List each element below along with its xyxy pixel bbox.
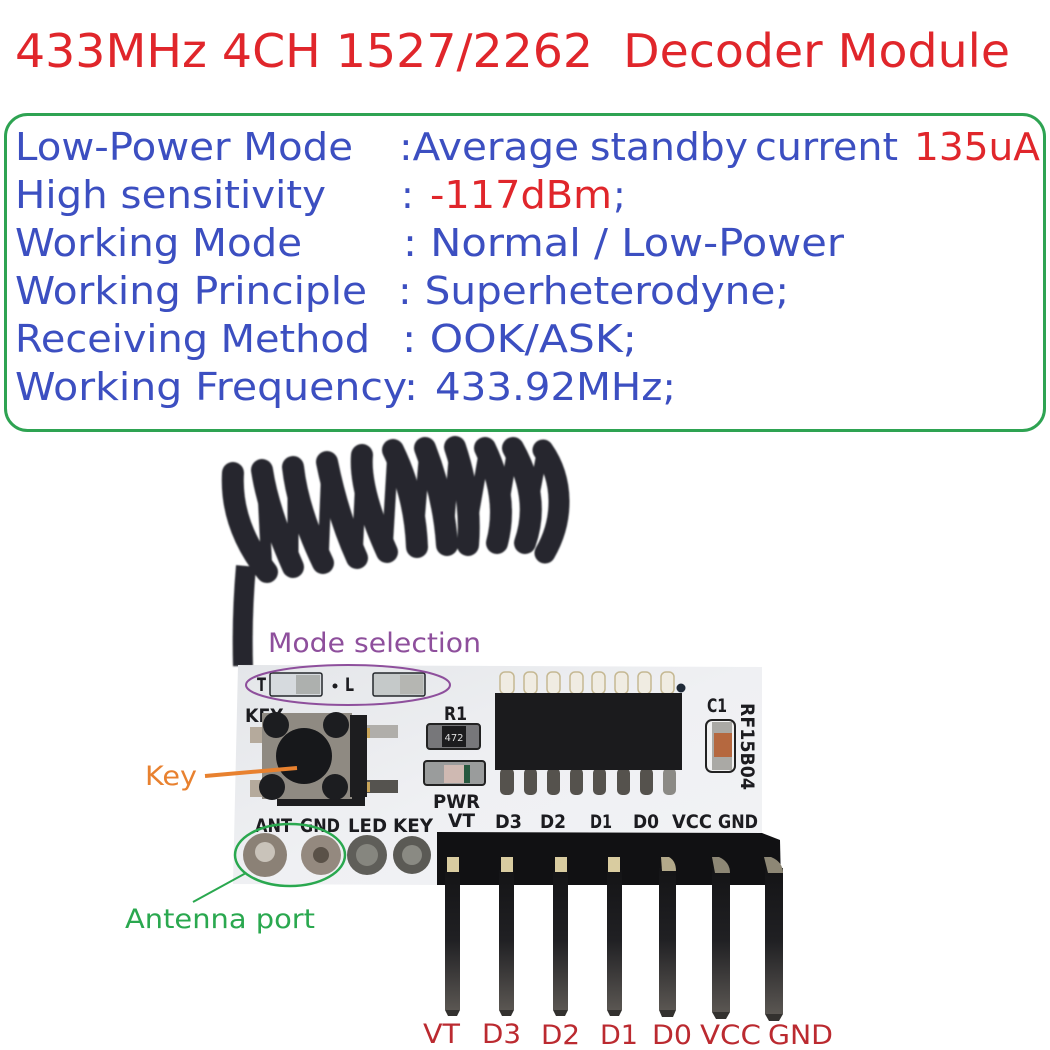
mode jumper T bbox=[257, 673, 322, 696]
pin silkscreen labels: ANT bbox=[255, 815, 292, 837]
spec: low-power mode: :Average bbox=[399, 125, 579, 169]
spec: receiving method: Receiving Method bbox=[15, 317, 370, 361]
board marking: RF15B04 bbox=[736, 703, 758, 790]
power LED bbox=[424, 761, 485, 813]
spec: working principle bbox=[15, 269, 789, 313]
resistor R1 bbox=[427, 703, 480, 749]
antenna coil bbox=[233, 447, 559, 666]
mode jumper L bbox=[332, 673, 425, 696]
pin silkscreen labels: VCC bbox=[672, 811, 712, 833]
key label: Key bbox=[145, 761, 197, 792]
pin VCC bbox=[712, 857, 730, 1019]
tactile key switch: KEY bbox=[245, 705, 283, 727]
mode jumper T: T bbox=[257, 674, 266, 696]
tactile key switch bbox=[245, 705, 398, 806]
spec: working frequency: Working Frequency: bbox=[15, 365, 418, 409]
pin D2 bbox=[553, 857, 568, 1016]
panel border bbox=[6, 114, 1044, 430]
pin silkscreen labels: LED bbox=[348, 815, 387, 837]
spec: receiving method: : OOK/ASK; bbox=[402, 317, 637, 361]
IC chip bbox=[495, 672, 686, 795]
pin silkscreen labels: D3 bbox=[495, 811, 522, 833]
spec: high sensitivity: -117dBm bbox=[430, 173, 612, 217]
power LED: PWR bbox=[433, 791, 480, 813]
pin D3 bbox=[499, 857, 514, 1016]
spec: low-power mode: standby bbox=[590, 125, 748, 169]
pin silkscreen labels bbox=[255, 810, 758, 837]
solder pads bbox=[243, 833, 431, 877]
antenna port ellipse bbox=[235, 824, 345, 886]
spec: low-power mode: 135uA bbox=[914, 125, 1040, 169]
spec: working mode: : Normal / Low-Power bbox=[403, 221, 844, 265]
pin silkscreen labels: VT bbox=[448, 810, 475, 832]
pin labels: VT bbox=[423, 1019, 461, 1050]
pin VT bbox=[445, 857, 460, 1016]
header block bbox=[437, 832, 781, 885]
antenna port label: Antenna port bbox=[125, 904, 315, 935]
spec: working frequency bbox=[15, 365, 676, 409]
spec: working mode bbox=[15, 221, 844, 265]
panel: specifications bbox=[6, 114, 1044, 430]
spec: high sensitivity: : bbox=[401, 173, 414, 217]
capacitor C1: C1 bbox=[707, 695, 727, 717]
mode selection label: Mode selection bbox=[268, 628, 481, 659]
resistor R1: R1 bbox=[444, 703, 467, 725]
spec: working principle: : Superheterodyne; bbox=[398, 269, 789, 313]
title: 433MHz 4CH 1527/2262 Decoder Module bbox=[15, 24, 1010, 78]
spec: low-power mode bbox=[15, 125, 1040, 169]
pin GND bbox=[764, 857, 783, 1021]
spec: working mode: Working Mode bbox=[15, 221, 302, 265]
pin silkscreen labels: D0 bbox=[633, 811, 659, 833]
spec: high sensitivity: ; bbox=[613, 173, 626, 217]
pin labels: D3 bbox=[482, 1019, 521, 1050]
mode jumper L: L bbox=[345, 674, 354, 696]
pin labels bbox=[423, 1019, 833, 1050]
board body bbox=[233, 665, 762, 885]
mode selection ellipse bbox=[246, 665, 450, 705]
pin silkscreen labels: D2 bbox=[540, 811, 566, 833]
pin silkscreen labels: GND bbox=[300, 815, 340, 837]
resistor R1: 472 bbox=[444, 733, 464, 744]
pin header bbox=[437, 832, 783, 1021]
spec: high sensitivity bbox=[15, 173, 626, 217]
pin silkscreen labels: D1 bbox=[590, 811, 612, 833]
pin D0 bbox=[659, 857, 676, 1017]
spec: working frequency: 433.92MHz; bbox=[435, 365, 676, 409]
arrow: key leader bbox=[205, 768, 297, 776]
spec: working principle: Working Principle bbox=[15, 269, 367, 313]
spec: receiving method bbox=[15, 317, 637, 361]
circuit board bbox=[233, 665, 762, 885]
pin silkscreen labels: KEY bbox=[393, 815, 433, 837]
pin silkscreen labels: GND bbox=[718, 811, 758, 833]
spec: low-power mode: Low-Power Mode bbox=[15, 125, 353, 169]
capacitor C1 bbox=[706, 695, 735, 772]
spec: high sensitivity: High sensitivity bbox=[15, 173, 326, 217]
spec: low-power mode: current bbox=[755, 125, 898, 169]
arrow: antenna port leader bbox=[193, 873, 246, 902]
pin D1 bbox=[607, 857, 622, 1016]
